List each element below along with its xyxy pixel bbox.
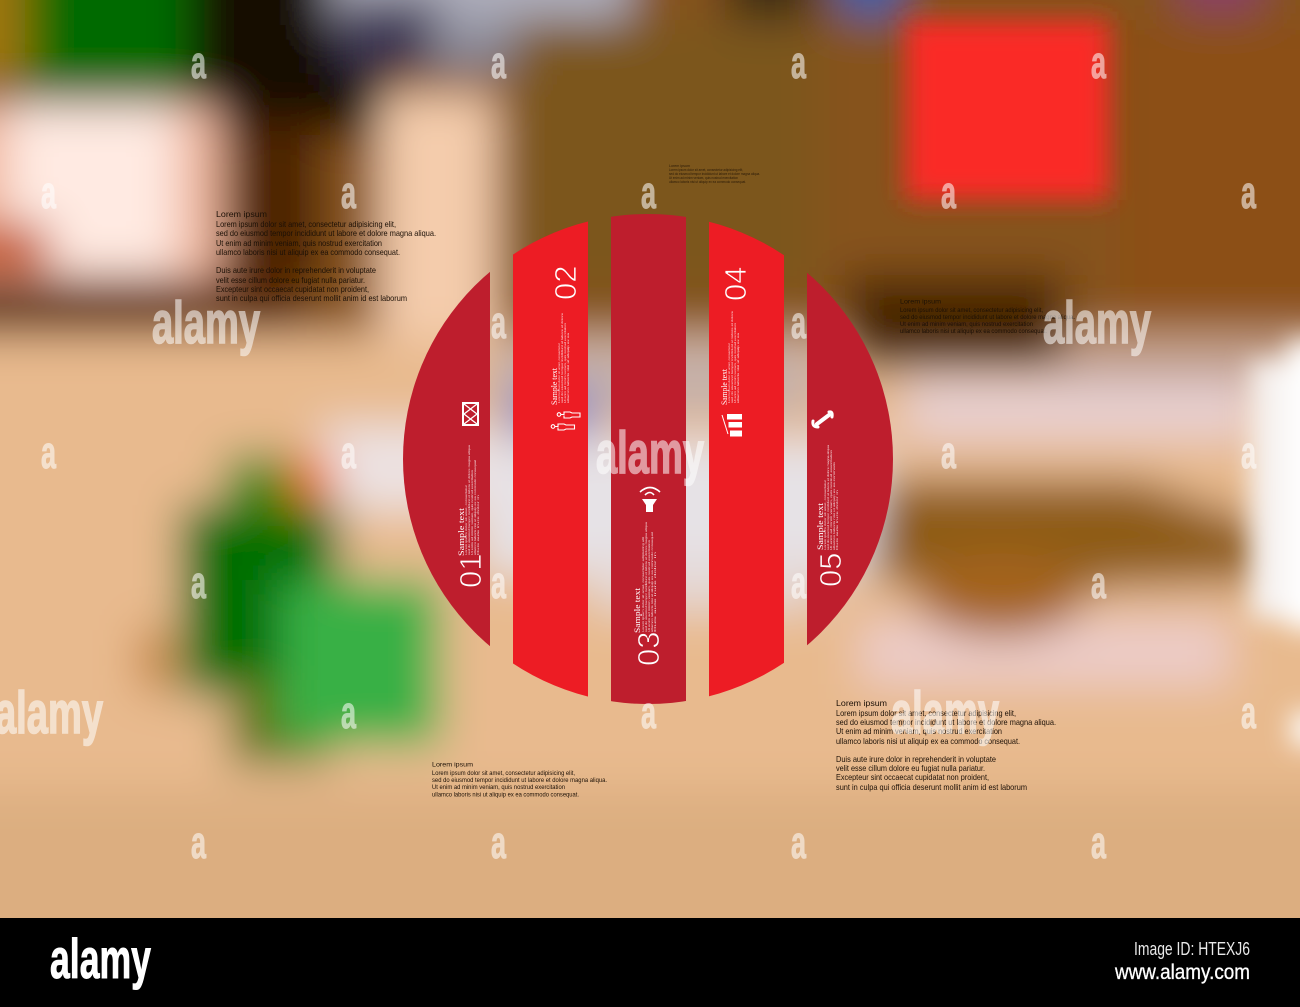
body: Ut enim ad minim veniam, quis nostrud exercitation: [829, 450, 833, 550]
watermark tile: small a letters: a: [41, 427, 57, 478]
heading: Sample text: [720, 368, 729, 405]
big watermark logos: alamy: [152, 290, 260, 356]
number 01: 01: [453, 554, 488, 588]
number 05: 05: [813, 553, 848, 587]
watermark tile: small a letters: a: [1091, 817, 1107, 868]
site url: www.alamy.com: [1114, 961, 1250, 984]
text block: right middle: ullamco laboris nisi ut aliquip ex ea commodo consequat.: [900, 328, 1047, 335]
body: [727, 311, 740, 403]
heading: Sample text: [550, 367, 559, 405]
strip 3 content: [631, 488, 666, 666]
watermark tile: small a letters: a: [341, 167, 357, 218]
body: sed do eiusmod tempor incididunt ut labore et dolore: [560, 313, 564, 403]
body: Ut enim ad minim veniam, quis nostrud exercitation: [647, 540, 651, 632]
text block: top left: Ut enim ad minim veniam, quis nostrud exercitation: [216, 238, 382, 248]
footer logo: alamy: [50, 927, 151, 990]
heading: Sample text: [633, 587, 642, 633]
strip 2: [513, 210, 588, 710]
number 03: 03: [631, 632, 666, 666]
strip 4 content: [718, 267, 753, 436]
watermark tile: small a letters: a: [791, 297, 807, 348]
body: ullamco laboris nisi ut aliquip ex ea: [736, 333, 740, 403]
icon: speaker with waves: [640, 488, 660, 512]
text block: top left: ullamco laboris nisi ut aliquip ex ea commodo consequat.: [216, 247, 400, 257]
text block: bottom centre: Lorem ipsum dolor sit amet, consectetur adipisicing elit,: [432, 770, 575, 777]
text block: top centre, tiny: Lorem ipsum: [669, 164, 690, 168]
text block: top centre, tiny: Ut enim ad minim veniam, quis nostrud exercitation: [669, 176, 738, 180]
text block: top left: velit esse cillum dolore eu fugiat nulla pariatur.: [216, 275, 365, 285]
text block: bottom right: Excepteur sint occaecat cupidatat non proident,: [836, 772, 989, 782]
watermark tile: small a letters: a: [41, 167, 57, 218]
body: Duis aute irure dolor in: [835, 489, 839, 550]
watermark tile: small a letters: a: [941, 167, 957, 218]
watermark tile: small a letters: a: [641, 687, 657, 738]
body: [557, 313, 570, 403]
watermark tile: small a letters: a: [341, 687, 357, 738]
circle divided into five vertical strips: [400, 210, 897, 710]
text block: top centre, tiny: Lorem ipsum dolor sit amet, consectetur adipisicing elit,: [669, 168, 743, 172]
text block: top left: sunt in culpa qui officia deserunt mollit anim id est laborum: [216, 293, 407, 303]
body: Duis aute irure dolor in: [476, 494, 480, 555]
watermark tile: small a letters: a: [641, 167, 657, 218]
watermark tile: small a letters: a: [791, 557, 807, 608]
text block: top left: Lorem ipsum dolor sit amet, consectetur adipisicing elit,: [216, 219, 396, 229]
body: Ut enim ad minim veniam, quis nostrud exercitation: [563, 323, 567, 403]
body: sed do eiusmod tempor incididunt ut labore et dolore: [730, 311, 734, 403]
body: Lorem ipsum dolor sit amet, consectetur: [464, 485, 468, 555]
text block: bottom right: Ut enim ad minim veniam, quis nostrud exercitation: [836, 726, 1002, 736]
watermark tile: small a letters: a: [1241, 687, 1257, 738]
text block: bottom right: sunt in culpa qui officia deserunt mollit anim id est laborum: [836, 782, 1027, 792]
text block: bottom right: Lorem ipsum: [836, 698, 887, 708]
body: [641, 522, 657, 632]
text block: top left: [216, 209, 436, 303]
text block: bottom right: sed do eiusmod tempor incididunt ut labore et dolore magna aliqua.: [836, 717, 1056, 727]
body: Lorem ipsum dolor sit amet, consectetur: [823, 480, 827, 550]
icon: two people: [551, 412, 580, 430]
heading: Sample text: [457, 507, 466, 556]
text block: bottom right: [836, 698, 1056, 792]
text block: right middle: [900, 298, 1075, 335]
text block: right middle: sed do eiusmod tempor incididunt ut labore et dolore magna aliqua.: [900, 314, 1075, 321]
big watermark logos: alamy: [596, 420, 704, 486]
text block: bottom right: velit esse cillum dolore eu fugiat nulla pariatur.: [836, 763, 985, 773]
text block: top centre, tiny: sed do eiusmod tempor incididunt ut labore et dolore magna aliqua.: [669, 172, 760, 176]
body: sed do eiusmod tempor incididunt ut labore et dolore magna aliqua: [644, 522, 648, 632]
watermark tile: small a letters: a: [1091, 37, 1107, 88]
body: Duis aute irure dolor in: [653, 551, 657, 632]
body: sed do eiusmod tempor incididunt ut labore et dolore magna aliqua: [826, 445, 830, 550]
watermark tile: small a letters: a: [491, 297, 507, 348]
big watermark logos: alamy: [0, 680, 103, 746]
text block: bottom centre: [432, 762, 607, 798]
body: ullamco laboris nisi ut aliquip ex ea: [566, 333, 570, 403]
watermark tile: small a letters: a: [491, 557, 507, 608]
strip 4: [709, 210, 784, 710]
watermark tile: small a letters: a: [341, 427, 357, 478]
watermark tile: small a letters: [41, 37, 1257, 868]
image id: Image ID: HTEXJ6: [1134, 939, 1250, 959]
body: Lorem ipsum dolor sit amet, consectetur adipisicing elit: [641, 537, 645, 632]
watermark tile: small a letters: a: [491, 37, 507, 88]
big watermark logos: alamy: [1043, 290, 1151, 356]
strip 2 content: [548, 266, 583, 430]
body: [464, 445, 480, 555]
strip 5: [807, 272, 893, 646]
text block: top left: Duis aute irure dolor in reprehenderit in voluptate: [216, 265, 376, 275]
watermark tile: small a letters: a: [791, 817, 807, 868]
footer bar: [0, 918, 1300, 1007]
watermark tile: small a letters: a: [941, 427, 957, 478]
watermark tile: small a letters: a: [191, 817, 207, 868]
watermark tile: small a letters: a: [191, 37, 207, 88]
text block: bottom right: ullamco laboris nisi ut aliquip ex ea commodo consequat.: [836, 736, 1020, 746]
text block: right middle: Ut enim ad minim veniam, quis nostrud exercitation: [900, 321, 1033, 328]
watermark tile: small a letters: a: [491, 817, 507, 868]
body: sed do eiusmod tempor incididunt ut labore et dolore magna aliqua: [467, 445, 471, 555]
text block: bottom centre: sed do eiusmod tempor incididunt ut labore et dolore magna aliqua.: [432, 777, 607, 784]
watermark tile: small a letters: a: [1241, 167, 1257, 218]
icon: envelope: [463, 403, 478, 425]
body: ullamco laboris nisi ut aliquip ex ea commodo consequat: [473, 460, 477, 555]
body: Ut enim ad minim veniam, quis nostrud exercitation: [470, 470, 474, 555]
text block: top left: sed do eiusmod tempor incididunt ut labore et dolore magna aliqua.: [216, 228, 436, 238]
watermark tile: small a letters: a: [1091, 557, 1107, 608]
text block: bottom right: Lorem ipsum dolor sit amet, consectetur adipisicing elit,: [836, 708, 1016, 718]
text block: bottom centre: ullamco laboris nisi ut aliquip ex ea commodo consequat.: [432, 792, 579, 798]
text block: right middle: Lorem ipsum: [900, 298, 942, 306]
text block: top centre, tiny: [669, 164, 760, 184]
body: Lorem ipsum dolor sit amet, consectetur: [727, 343, 731, 403]
text block: right middle: Lorem ipsum dolor sit amet, consectetur adipisicing elit,: [900, 307, 1043, 314]
watermark tile: small a letters: a: [1241, 427, 1257, 478]
body: Ut enim ad minim veniam, quis nostrud exercitation: [733, 323, 737, 403]
icon: bar chart with arrow: [722, 414, 742, 436]
body: ullamco laboris nisi ut aliquip ex ea commodo: [832, 462, 836, 550]
heading: Sample text: [816, 502, 825, 550]
strip 3: [611, 210, 686, 710]
number 04: 04: [718, 267, 753, 301]
number 02: 02: [548, 266, 583, 300]
big watermark logos: [0, 290, 1151, 746]
text block: top left: Excepteur sint occaecat cupidatat non proident,: [216, 284, 369, 294]
body: ullamco laboris nisi ut aliquip ex ea commodo consequat: [650, 532, 654, 632]
body: Lorem ipsum dolor sit amet, consectetur: [557, 343, 561, 403]
strip 5 content: [813, 412, 848, 587]
big watermark logos: alamy: [891, 680, 999, 746]
icon: wrench: [813, 412, 832, 427]
watermark tile: small a letters: a: [791, 37, 807, 88]
strip 1: [403, 272, 490, 646]
text block: bottom right: Duis aute irure dolor in reprehenderit in voluptate: [836, 754, 996, 764]
text block: top centre, tiny: ullamco laboris nisi ut aliquip ex ea commodo consequat.: [669, 180, 746, 184]
text block: bottom centre: Lorem ipsum: [432, 762, 474, 768]
text block: top left: Lorem ipsum: [216, 209, 267, 219]
watermark tile: small a letters: a: [191, 557, 207, 608]
body: [823, 445, 839, 550]
strip 1 content: [453, 403, 488, 588]
text block: bottom centre: Ut enim ad minim veniam, quis nostrud exercitation: [432, 784, 565, 791]
